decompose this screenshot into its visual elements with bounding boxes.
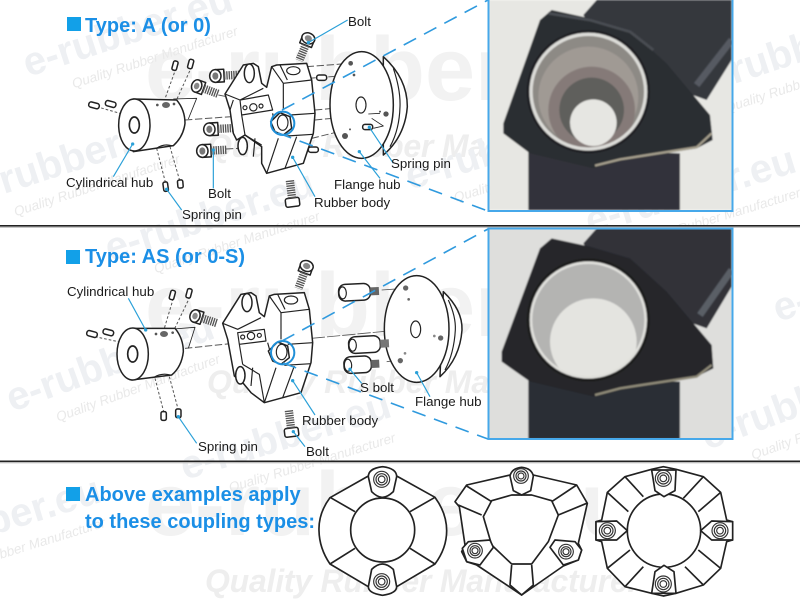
coupling: three-bolt type <box>455 467 587 595</box>
watermark layer: Quality Rubber Manufacturer <box>227 430 398 495</box>
rubber body <box>223 293 313 403</box>
text block: applicable types: to these coupling types: <box>85 511 315 533</box>
spring pins <box>88 59 373 192</box>
label: Cylindrical hub: Cylindrical hub <box>67 284 154 299</box>
watermark layer: e-rubber.eu <box>99 161 320 271</box>
watermark layer: e-rubber.eu <box>145 256 635 356</box>
watermark layer: e-rubber.eu <box>175 383 396 489</box>
axis lines <box>97 63 383 183</box>
watermark layer: Quality Rubber Manufacturer <box>207 128 644 164</box>
exploded diagram: Type A <box>88 20 407 210</box>
photo: rubber element with metal bushing <box>489 0 732 210</box>
zoom guide lines <box>278 0 488 211</box>
bolt left <box>188 308 219 329</box>
watermark layer: Quality Rubber Manufacturer <box>12 151 182 219</box>
flange hub <box>384 276 462 382</box>
label: Bolt: Bolt <box>348 14 371 29</box>
watermark layer: e-rubber.eu <box>580 138 800 244</box>
watermark layer: Quality Rubber Manufacturer <box>152 208 322 276</box>
coupling: two-bolt type <box>319 467 447 595</box>
watermark layer: Quality Rubber Manufacturer <box>452 140 623 205</box>
bolt top <box>293 31 317 63</box>
watermark layer: e-rubber.eu <box>0 305 220 420</box>
bolt left <box>190 78 221 100</box>
bolt top <box>292 259 315 291</box>
panel: Type AS section <box>66 228 732 459</box>
detail circle <box>271 341 294 364</box>
watermark layer: Quality Rubber Manufacturer <box>207 364 649 400</box>
label: Flange hub: Flange hub <box>415 394 482 409</box>
label: Bolt lower: Bolt <box>208 186 231 201</box>
heading: Type AS: Type: AS (or 0-S) <box>85 246 245 268</box>
bolt bottom <box>282 409 299 437</box>
S bolts <box>338 283 389 374</box>
spring pins <box>86 288 192 420</box>
label: Rubber body: Rubber body <box>302 413 378 428</box>
coupling outlines <box>319 467 733 596</box>
coupling: four-bolt type <box>596 467 733 596</box>
text block: applicable types <box>66 484 315 533</box>
watermark layer: e-rubber.eu <box>145 20 635 120</box>
label: Rubber body: Rubber body <box>314 195 390 210</box>
divider <box>0 460 800 463</box>
text block: applicable types: Above examples apply <box>85 484 302 506</box>
bolt centre left <box>203 122 234 136</box>
label: Spring pin: Spring pin <box>182 207 242 222</box>
flange hub <box>330 52 407 158</box>
bolt bottom <box>283 179 300 207</box>
panel: Type A section <box>66 0 732 222</box>
bolt lower left <box>196 143 227 158</box>
panel: applicable coupling types <box>66 467 733 596</box>
axis lines <box>95 288 440 412</box>
zoom guide lines <box>282 229 488 439</box>
label: Flange hub: Flange hub <box>334 177 401 192</box>
exploded diagram: Type AS <box>86 259 462 447</box>
watermark layer: e-rubber.eu <box>400 93 621 199</box>
photo frame <box>488 0 732 211</box>
watermark layer: e-rubber.eu <box>145 455 635 555</box>
divider <box>0 225 800 228</box>
watermark layer: Quality Rubber Manufacturer <box>54 351 223 425</box>
cylindrical hub <box>117 328 183 380</box>
leader lines <box>113 20 393 210</box>
label: Spring pin: Spring pin <box>198 439 258 454</box>
watermark layer: Quality Rubber Manufacturer <box>632 185 800 250</box>
photo frame <box>488 228 732 439</box>
label: Cylindrical hub: Cylindrical hub <box>66 175 153 190</box>
cylindrical hub <box>119 99 185 152</box>
bolt upper left <box>209 68 240 83</box>
label: S bolt: S bolt <box>360 380 394 395</box>
detail circle <box>271 112 294 135</box>
label: Spring pin right: Spring pin <box>391 156 451 171</box>
label: Bolt: Bolt <box>306 444 329 459</box>
heading: Type A: Type: A (or 0) <box>85 15 211 37</box>
rubber body <box>225 63 315 173</box>
leader lines <box>128 298 430 447</box>
watermark layer: Quality Rubber Manufacturer <box>205 563 642 599</box>
photo: rubber element with open bore <box>489 228 732 439</box>
watermark layer: Quality Rubber Manufacturer <box>70 23 240 91</box>
